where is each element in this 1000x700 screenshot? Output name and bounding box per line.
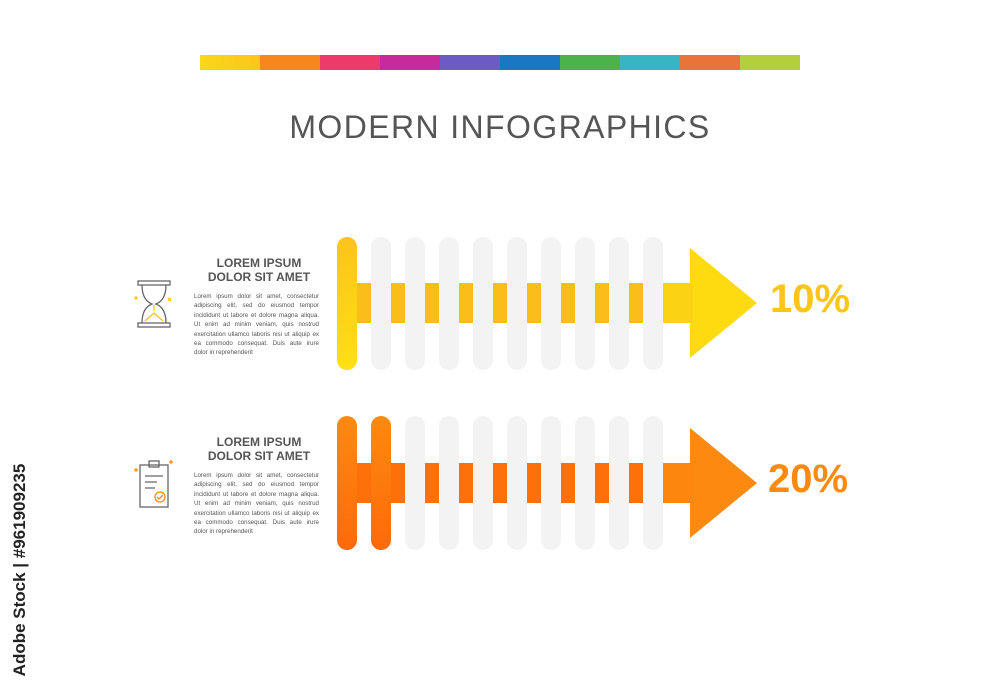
text block 1: DOLOR SIT AMET <box>208 270 310 284</box>
text block 2 <box>194 435 319 535</box>
row 2 chart <box>337 416 757 550</box>
icon: hourglass <box>134 281 171 327</box>
text block 2: LOREM IPSUM <box>217 435 301 449</box>
text block 2: Lorem ipsum dolor sit amet, consectetur adipiscing elit, sed do eiusmod tempor incididunt ut labore et dolore magna aliqua. Ut enim ad minim veniam, quis nostrud exercitation ullamco laboris nisi ut aliquip ex ea commodo consequat. Duis aute irure dolor in reprehenderit <box>194 472 319 535</box>
value 10%: 10% <box>770 277 850 321</box>
icon: clipboard <box>134 460 173 507</box>
value 20%: 20% <box>768 457 848 501</box>
text block 1: LOREM IPSUM <box>217 256 301 270</box>
text block 1 <box>194 256 319 356</box>
row 1 chart <box>337 237 757 370</box>
watermark side text: Adobe Stock | #961909235 <box>10 464 29 676</box>
text block 2: DOLOR SIT AMET <box>208 449 310 463</box>
title: MODERN INFOGRAPHICS <box>289 109 711 145</box>
text block 1: Lorem ipsum dolor sit amet, consectetur adipiscing elit, sed do eiusmod tempor incididunt ut labore et dolore magna aliqua. Ut enim ad minim veniam, quis nostrud exercitation ullamco laboris nisi ut aliquip ex ea commodo consequat. Duis aute irure dolor in reprehenderit <box>194 293 319 356</box>
color strip <box>200 55 800 70</box>
